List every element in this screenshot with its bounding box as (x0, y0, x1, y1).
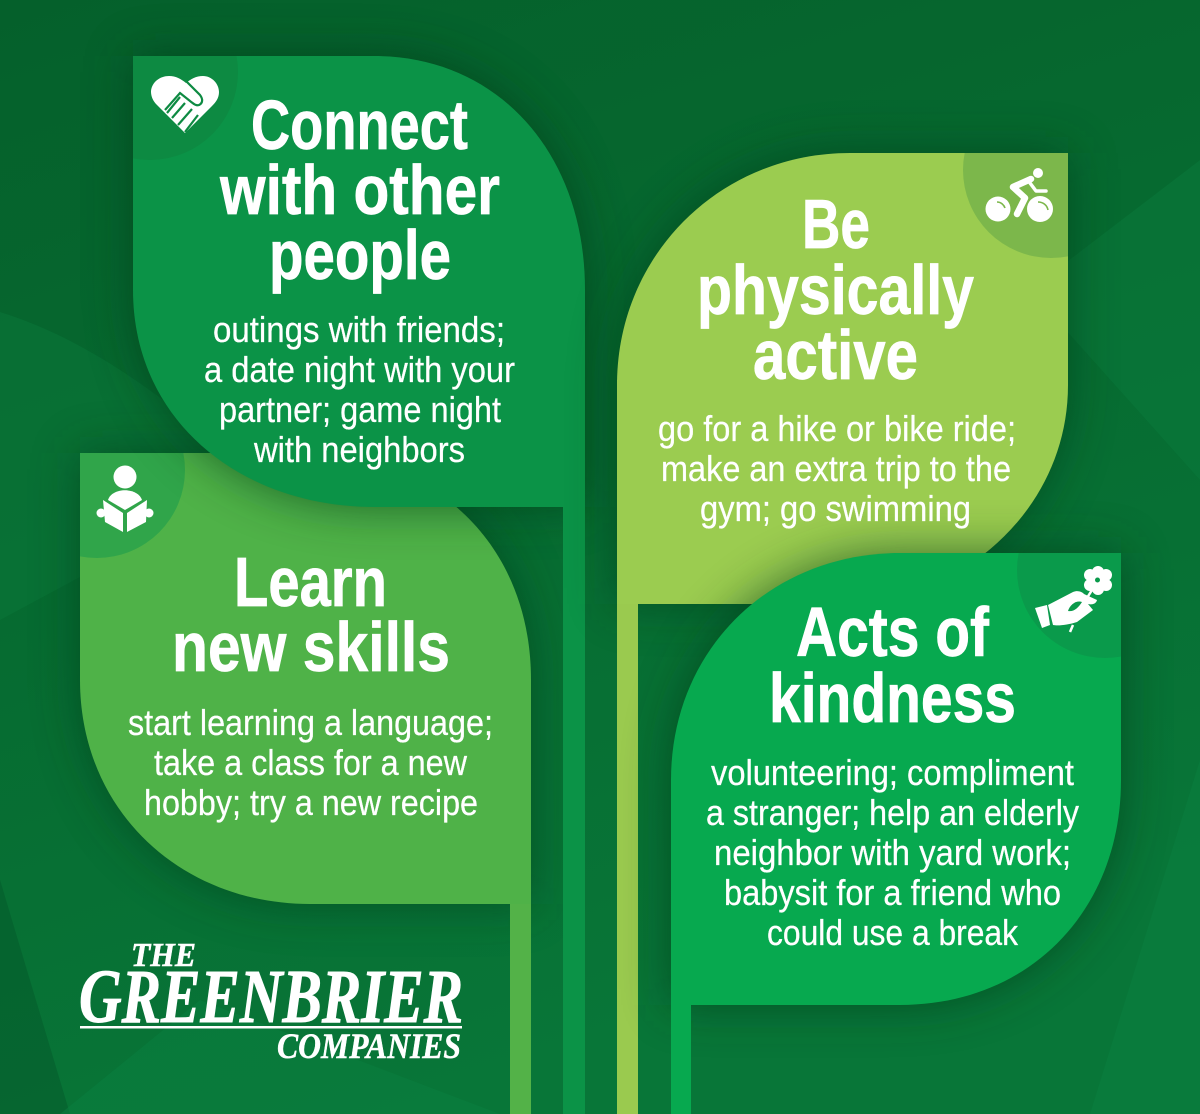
heading: be physically active: active (753, 316, 918, 394)
text: kindness examples: volunteering; compliment (711, 752, 1074, 793)
logo: The Greenbrier Companies (79, 937, 463, 1066)
text: active examples (658, 408, 1016, 529)
text: kindness examples: babysit for a friend who (724, 872, 1061, 913)
heading: learn new skills: new skills (172, 608, 450, 686)
text: connect examples: with neighbors (253, 429, 465, 470)
text: kindness examples: neighbor with yard work; (714, 832, 1071, 873)
text: connect examples: partner; game night (219, 389, 501, 430)
panel: connect with other people leaf (119, 42, 600, 1114)
icon badge: active (963, 153, 1068, 258)
heading: acts of kindness: Acts of (796, 593, 990, 671)
panel: be physically active leaf (602, 139, 1086, 1114)
panel: learn new skills leaf (64, 436, 549, 1114)
text: learn examples: start learning a language; (128, 702, 493, 743)
icon: cyclist (986, 168, 1053, 222)
stem: learn new skills (510, 700, 531, 1114)
text: connect examples: outings with friends; (213, 309, 505, 350)
text: learn examples: hobby; try a new recipe (144, 782, 478, 823)
text: kindness examples (706, 752, 1079, 953)
text: active examples: go for a hike or bike ride; (658, 408, 1016, 449)
logo: The Greenbrier Companies: GREENBRIER (79, 955, 463, 1039)
icon: hand holding flower (1035, 566, 1112, 632)
heading: learn new skills: Learn (234, 543, 387, 621)
icon: heart handshake (151, 76, 219, 133)
heading: be physically active (697, 185, 974, 394)
heading: be physically active: physically (697, 251, 974, 329)
text: kindness examples: a stranger; help an elderly (706, 792, 1079, 833)
text: active examples: make an extra trip to the (661, 448, 1011, 489)
logo: The Greenbrier Companies: THE (131, 937, 196, 974)
icon badge: learn (80, 453, 185, 558)
panel: acts of kindness leaf (652, 521, 1140, 1114)
heading: connect: with other (219, 151, 500, 229)
stem: connect (563, 290, 585, 1114)
stem: kindness (671, 780, 691, 1114)
heading: connect (219, 86, 500, 294)
text: learn examples: take a class for a new (154, 742, 468, 783)
text: active examples: gym; go swimming (700, 488, 971, 529)
icon badge: kindness (1017, 553, 1121, 658)
text: learn examples (128, 702, 493, 823)
heading: be physically active: Be (802, 185, 870, 263)
heading: connect: Connect (251, 86, 468, 164)
stem: active (617, 380, 638, 1114)
heading: learn new skills (172, 543, 450, 686)
text: connect examples: a date night with your (204, 349, 515, 390)
heading: acts of kindness: kindness (769, 659, 1016, 737)
icon: person reading (96, 466, 154, 532)
icon badge: connect (133, 56, 238, 160)
logo: The Greenbrier Companies: COMPANIES (277, 1026, 461, 1066)
heading: acts of kindness (769, 593, 1016, 737)
text: kindness examples: could use a break (767, 912, 1019, 953)
text: connect examples (204, 309, 515, 470)
heading: connect: people (269, 216, 451, 294)
